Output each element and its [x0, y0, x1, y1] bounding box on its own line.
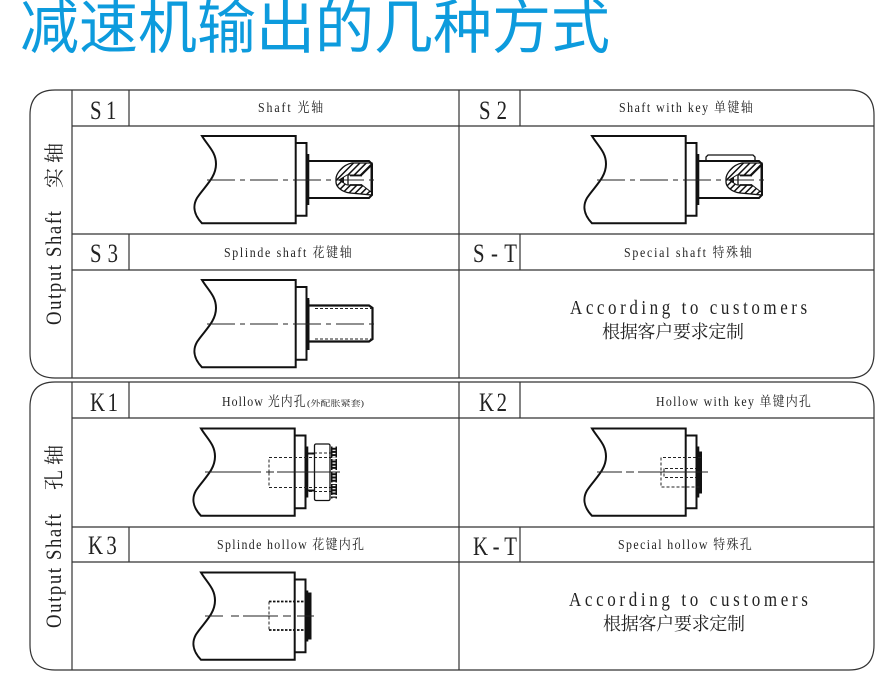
drawing K1 — [193, 428, 340, 516]
drawing S3 — [194, 280, 378, 367]
code S-T: S-T — [473, 240, 517, 269]
code S1: S1 — [90, 97, 116, 126]
code S3: S3 — [90, 240, 118, 269]
label S3: Splinde shaft 花键轴 — [224, 244, 352, 260]
code K-T: K-T — [473, 533, 517, 562]
drawing S2 — [584, 136, 768, 223]
label K-T: Special hollow 特殊孔 — [618, 536, 752, 552]
side heading: hollow shaft: 孔轴 — [43, 445, 66, 490]
drawing K2 — [584, 428, 708, 516]
side heading: output shaft — [43, 143, 66, 325]
panel frame and grid — [30, 90, 874, 378]
label S1: Shaft 光轴 — [258, 99, 323, 115]
label S2: Shaft with key 单键轴 — [619, 99, 753, 115]
code K3: K3 — [88, 532, 117, 561]
side heading: hollow shaft: Output Shaft — [43, 514, 66, 628]
drawing S1 — [194, 136, 378, 223]
panel: hollow shaft — [30, 382, 874, 670]
drawing K3 — [193, 572, 314, 660]
note S-T: 根据客户要求定制 — [602, 321, 744, 342]
note K-T: 根据客户要求定制 — [603, 613, 745, 634]
label K3: Splinde hollow 花键内孔 — [217, 536, 364, 552]
code S2: S2 — [479, 97, 507, 126]
note K-T — [569, 589, 808, 634]
label K1: Hollow 光内孔 — [222, 393, 306, 409]
side heading: output shaft: Output Shaft — [43, 211, 66, 325]
note K-T: According to customers — [569, 589, 808, 611]
note S-T — [570, 297, 807, 342]
label K1 — [222, 393, 364, 409]
label K1: (外配胀紧套) — [307, 398, 364, 408]
label K2: Hollow with key 单键内孔 — [656, 393, 811, 409]
note S-T: According to customers — [570, 297, 807, 319]
side heading: output shaft: 实轴 — [43, 143, 66, 188]
panel frame and grid — [30, 382, 874, 670]
panel: output shaft — [30, 90, 874, 378]
code K2: K2 — [479, 389, 507, 418]
side heading: hollow shaft — [43, 445, 66, 628]
code K1: K1 — [90, 389, 118, 418]
label S-T: Special shaft 特殊轴 — [624, 244, 752, 260]
